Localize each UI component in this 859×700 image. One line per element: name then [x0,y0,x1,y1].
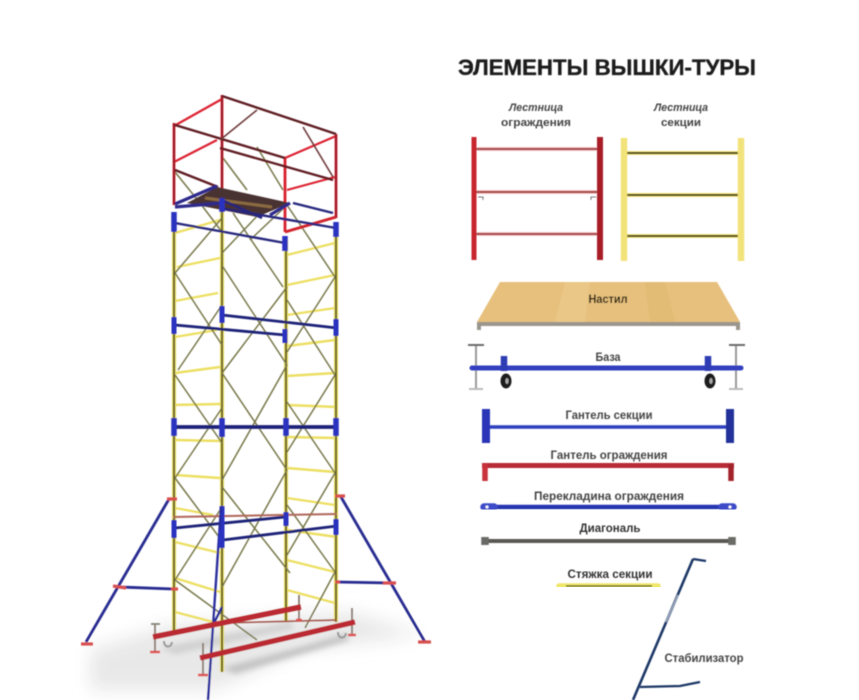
blue dumbbell rails [173,306,337,548]
section tie: Стяжка секции [568,569,652,581]
diagonal braces [175,147,335,640]
work platform [174,186,336,251]
base: База [596,352,621,364]
label: section ladder [653,102,708,129]
section tie [559,569,658,586]
red base beams with wheels [150,595,356,675]
diagonal: Диагональ [580,523,640,535]
guard crossbar: Перекладина ограждения [534,491,684,503]
label: section ladder: Лестница [653,102,708,114]
diagonal [484,523,734,545]
scaffold tower illustration [81,95,431,700]
label: guard ladder: Лестница [508,102,563,114]
stabilizer [633,559,744,700]
base [468,345,745,389]
yellow ladder drawing [624,138,741,261]
guard ladder [474,102,600,260]
outrigger stabilizers [81,496,431,700]
section ladder [624,102,741,261]
ground shadow [90,612,425,690]
red guard frame [174,95,336,232]
deck: Настил [588,294,628,306]
label: guard ladder [501,102,571,129]
label: section ladder: секции [661,117,701,129]
yellow section ladders [173,205,337,672]
title: ЭЛЕМЕНТЫ ВЫШКИ-ТУРЫ [458,55,756,80]
label: guard ladder: ограждения [501,117,571,129]
guard dumbbell: Гантель ограждения [550,450,668,462]
deck [477,282,740,330]
stabilizer: Стабилизатор [664,653,744,665]
guard crossbar [484,491,733,508]
red ladder drawing [474,137,600,260]
section dumbbell: Гантель секции [566,410,652,422]
